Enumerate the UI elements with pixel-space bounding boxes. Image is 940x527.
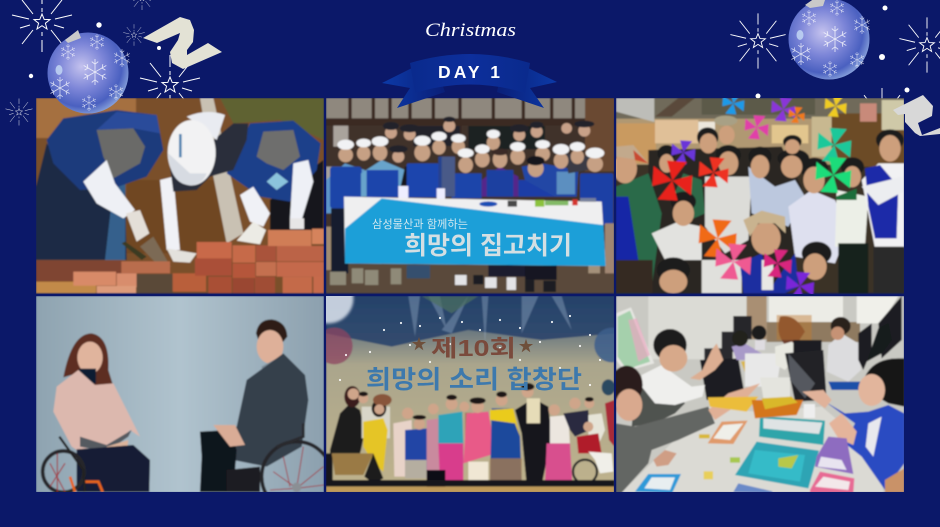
hats — [743, 211, 786, 237]
stage backdrop text: 희망의 소리 합창단 — [366, 366, 582, 394]
stage equipment — [326, 453, 333, 480]
stage backdrop text: ★ — [518, 338, 534, 355]
photo: Voice of Hope choir on stage — [326, 296, 614, 492]
ornament: right blue bauble — [788, 0, 870, 80]
background chairs and kids — [733, 316, 752, 339]
stage backdrop text: 제10회 — [431, 335, 516, 361]
legs and shoes — [344, 262, 349, 274]
bricks — [36, 261, 121, 281]
heading: day 1: DAY 1 — [438, 62, 500, 82]
performers — [330, 403, 365, 453]
crowd shirts — [648, 147, 802, 293]
table — [622, 407, 883, 493]
blue vests and bodies — [326, 163, 365, 213]
banner text: 희망의 집고치기 — [404, 232, 572, 260]
boy left — [616, 364, 644, 400]
helmets — [170, 123, 248, 192]
heads — [348, 386, 594, 432]
banner — [344, 197, 606, 266]
photo: two wheelchair users — [36, 296, 324, 492]
back row faces — [385, 120, 590, 163]
pinwheels — [721, 98, 746, 116]
sticky note board — [616, 307, 654, 372]
helmet row — [338, 135, 603, 177]
banner text: 삼성물산과 함께하는 — [372, 217, 468, 231]
faces and hair — [657, 127, 904, 283]
title: Christmas script: Christmas — [425, 20, 516, 41]
woman — [62, 332, 113, 386]
right worker — [270, 160, 323, 233]
woman right — [865, 358, 904, 407]
stage lights — [339, 315, 601, 386]
photo: group holding the Habitat banner — [326, 98, 614, 293]
stage backdrop text — [366, 335, 582, 394]
banner text — [372, 218, 570, 256]
game box and boards — [759, 416, 825, 445]
ornament: left blue bauble — [48, 30, 130, 114]
decorations behind the photos — [5, 0, 940, 142]
ribbon: right grey streamer — [893, 95, 940, 136]
photo: children with pinwheels — [613, 92, 904, 300]
man — [256, 319, 287, 342]
day 1 ribbon badge — [382, 54, 557, 108]
man left — [631, 388, 686, 428]
photo: board game session — [611, 296, 904, 493]
ribbon: left cream streamer — [143, 17, 222, 69]
left worker jeans — [36, 143, 127, 260]
photo: volunteers laying bricks — [36, 98, 324, 293]
stage backdrop text: ★ — [411, 336, 427, 353]
